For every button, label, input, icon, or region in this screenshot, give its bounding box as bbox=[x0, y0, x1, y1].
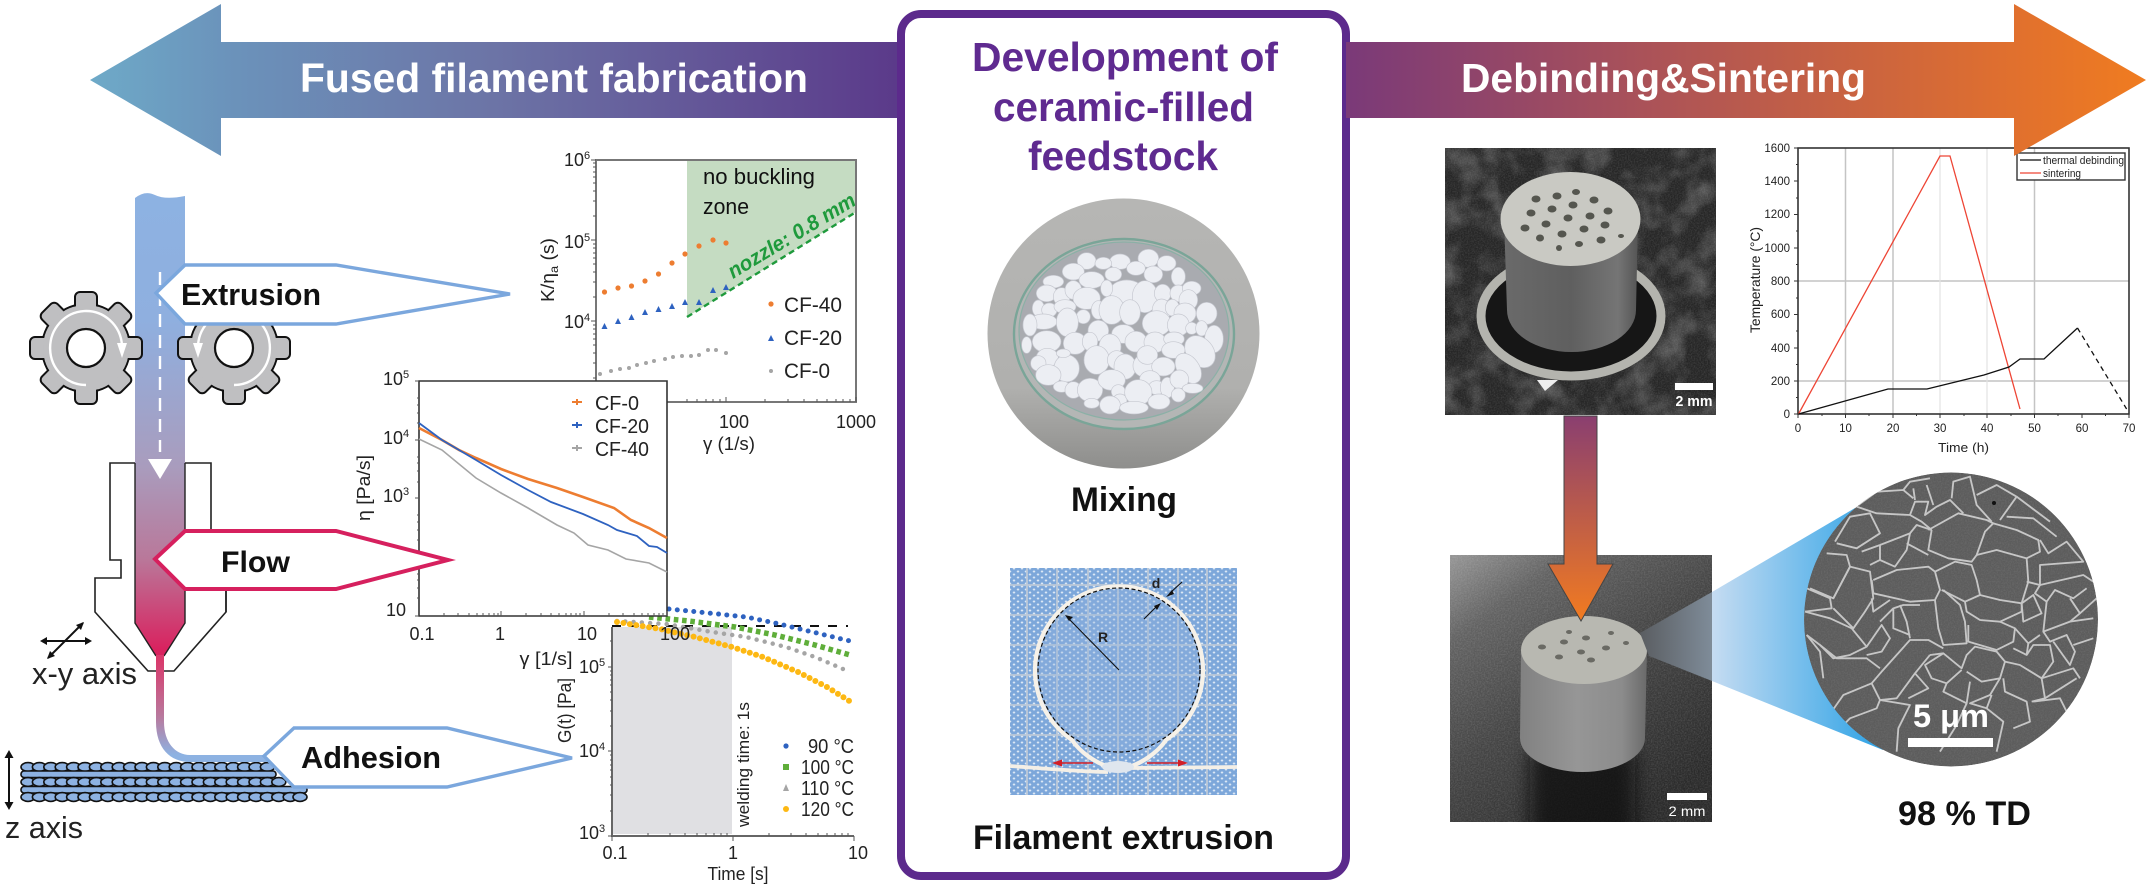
row 3 bbox=[21, 778, 286, 786]
scale bar bbox=[1908, 738, 1993, 747]
deposited layers bbox=[21, 763, 307, 801]
axis labels: 10 bbox=[579, 657, 599, 677]
axis labels: 0 bbox=[1784, 409, 1790, 421]
axis labels: (s) bbox=[538, 238, 558, 266]
photo: printed green part bbox=[1445, 148, 1716, 415]
series CF-40 bbox=[602, 237, 774, 307]
filament channel bbox=[135, 193, 185, 656]
curve CF-40 bbox=[419, 439, 667, 572]
axis labels: 5 bbox=[584, 232, 590, 244]
heading: development of ceramic-filled feedstock: feedstock bbox=[1028, 133, 1218, 179]
axis labels: 10 bbox=[579, 741, 599, 761]
row 5 bbox=[21, 793, 307, 801]
curve: sintering bbox=[1798, 156, 2020, 414]
axis labels: 10 bbox=[564, 150, 584, 170]
photo: SEM microstructure bbox=[1804, 472, 2098, 767]
scale bar bbox=[1675, 383, 1713, 410]
legend: CF-0 bbox=[595, 392, 639, 415]
axis labels: 4 bbox=[403, 428, 409, 440]
heading: development of ceramic-filled feedstock bbox=[972, 34, 1278, 179]
photo: filament loop on mesh: R bbox=[1098, 629, 1108, 645]
row 1 bbox=[21, 763, 274, 771]
icon: right gear bbox=[178, 292, 290, 404]
axis labels: 10 bbox=[1839, 423, 1852, 435]
axis labels: Time (h) bbox=[1938, 440, 1989, 455]
legend bbox=[572, 392, 649, 461]
axis labels bbox=[1747, 143, 2135, 455]
axis labels: 3 bbox=[599, 823, 605, 835]
nozzle outline bbox=[95, 463, 226, 671]
scale bar: 2 mm bbox=[1676, 393, 1712, 410]
axis labels: η [Pa/s] bbox=[354, 455, 374, 521]
label: x-y axis: x-y axis bbox=[32, 656, 137, 691]
heading: development of ceramic-filled feedstock: ceramic-filled bbox=[993, 84, 1254, 130]
axis labels: 1 bbox=[728, 843, 738, 863]
legend: CF-40 bbox=[784, 294, 842, 317]
row 4 bbox=[21, 786, 307, 793]
axis labels: 1600 bbox=[1764, 143, 1790, 155]
axis labels: 1000 bbox=[1764, 243, 1790, 255]
axis labels: 400 bbox=[1771, 343, 1790, 355]
label: 98 % TD: 98 % TD bbox=[1898, 795, 2031, 833]
axis labels: 600 bbox=[1771, 309, 1790, 321]
legend: CF-20 bbox=[784, 327, 842, 350]
arrow: filament direction bbox=[148, 272, 172, 479]
axis labels: 70 bbox=[2123, 423, 2135, 435]
callout: extrusion bbox=[156, 265, 510, 324]
axis labels: 10 bbox=[383, 428, 403, 448]
legend: 120 °C bbox=[801, 799, 854, 821]
legend: sintering bbox=[2043, 168, 2081, 180]
curve CF-0 bbox=[419, 428, 667, 538]
chart: viscosity vs shear rate bbox=[354, 369, 690, 669]
axis labels: 40 bbox=[1981, 423, 1993, 435]
axis labels: 10 bbox=[383, 486, 403, 506]
icon: x-y axis arrows bbox=[40, 622, 92, 659]
axis labels: 10 bbox=[383, 369, 403, 389]
axis labels: 5 bbox=[403, 369, 409, 381]
axis labels bbox=[538, 150, 876, 454]
axis labels: 0.1 bbox=[409, 624, 435, 644]
chart: relaxation modulus G(t) bbox=[555, 609, 868, 884]
callout: adhesion: Adhesion bbox=[301, 740, 441, 775]
scale bar: 2 mm bbox=[1668, 803, 1706, 819]
callout: flow: Flow bbox=[221, 546, 291, 579]
axis labels: 1200 bbox=[1764, 209, 1790, 221]
axis labels: a bbox=[547, 266, 561, 273]
green zone labels: zone bbox=[703, 194, 749, 219]
photo: sintered part bbox=[1450, 555, 1712, 840]
chart: temperature profile bbox=[1747, 143, 2135, 455]
axis labels: 20 bbox=[1887, 423, 1899, 435]
axis labels: 5 bbox=[599, 657, 605, 669]
legend: thermal debinding bbox=[2043, 155, 2124, 167]
axis labels: Temperature (°C) bbox=[1747, 227, 1763, 333]
green zone labels: nozzle: 0.8 mm bbox=[724, 189, 860, 283]
axis labels: 100 bbox=[719, 412, 749, 432]
axis labels bbox=[354, 369, 690, 669]
arrow: debinding and sintering bbox=[1346, 4, 2146, 156]
legend bbox=[784, 294, 842, 383]
legend: CF-40 bbox=[595, 438, 649, 461]
axis labels: 10 bbox=[579, 823, 599, 843]
green zone labels: no buckling bbox=[703, 164, 815, 189]
heading: development of ceramic-filled feedstock: Development of bbox=[972, 34, 1278, 80]
photo: filament loop on mesh: d bbox=[1152, 575, 1160, 591]
legend: 100 °C bbox=[801, 757, 854, 779]
axis labels: 0.1 bbox=[602, 843, 628, 863]
axis labels: 50 bbox=[2028, 423, 2041, 435]
legend: 110 °C bbox=[801, 778, 854, 800]
axis labels: 4 bbox=[599, 741, 605, 753]
callout: adhesion bbox=[264, 728, 572, 787]
axis labels: 10 bbox=[564, 232, 584, 252]
axis labels: 60 bbox=[2076, 423, 2088, 435]
axis labels: γ [1/s] bbox=[520, 649, 572, 669]
series 110 C bbox=[617, 621, 850, 672]
legend: CF-20 bbox=[595, 415, 649, 438]
axis labels: γ (1/s) bbox=[703, 434, 755, 454]
axis labels: 800 bbox=[1771, 276, 1790, 288]
curve CF-20 bbox=[419, 423, 667, 553]
legend bbox=[783, 736, 854, 821]
heading: fused filament fabrication: Fused filament fabrication bbox=[300, 55, 808, 101]
axis labels: 1400 bbox=[1764, 176, 1790, 188]
legend: 90 °C bbox=[808, 736, 854, 758]
icon: left gear bbox=[30, 292, 142, 404]
axis labels: 1 bbox=[495, 624, 505, 644]
extruded filament bbox=[156, 655, 285, 762]
axis labels: K/η bbox=[538, 275, 558, 302]
panel: development of ceramic-filled feedstock bbox=[901, 14, 1346, 876]
axis labels: 4 bbox=[584, 312, 590, 324]
series CF-20 bbox=[602, 284, 774, 341]
axis labels: 10 bbox=[564, 312, 584, 332]
chart: buckling K/eta vs shear rate bbox=[538, 150, 876, 454]
scale bar bbox=[1667, 793, 1707, 819]
welding time label: welding time: 1s bbox=[734, 702, 753, 828]
legend bbox=[2017, 153, 2125, 180]
axis labels: 1000 bbox=[836, 412, 876, 432]
photo: filament loop on mesh bbox=[1010, 568, 1237, 795]
axis labels bbox=[555, 657, 868, 884]
row 2 bbox=[21, 771, 276, 778]
axis labels: 10 bbox=[577, 624, 597, 644]
series 100 C bbox=[649, 617, 850, 655]
axis labels: 30 bbox=[1934, 423, 1946, 435]
series 90 C bbox=[669, 609, 850, 641]
callout: extrusion: Extrusion bbox=[181, 278, 321, 312]
callout: flow bbox=[155, 531, 448, 589]
arrow: debinding to sintering bbox=[1548, 416, 1613, 621]
magnification cone bbox=[1640, 508, 1883, 750]
photo: pellets in dish bbox=[988, 198, 1260, 468]
heading: debinding and sintering: Debinding&Sintering bbox=[1461, 55, 1866, 101]
axis labels: 0 bbox=[1795, 423, 1801, 435]
axis labels: 10 bbox=[848, 843, 868, 863]
curve: thermal debinding bbox=[1798, 328, 2127, 414]
axis labels: Time [s] bbox=[708, 864, 768, 884]
axis labels: 3 bbox=[403, 486, 409, 498]
axis labels: 6 bbox=[584, 150, 590, 162]
axis labels: 200 bbox=[1771, 376, 1790, 388]
label: z axis: z axis bbox=[5, 811, 83, 845]
axis labels: 100 bbox=[660, 624, 690, 644]
series CF-0 bbox=[598, 348, 773, 376]
legend: CF-0 bbox=[784, 360, 830, 383]
series 120 C bbox=[617, 622, 851, 702]
arrow: fused filament fabrication bbox=[90, 4, 900, 156]
label: filament extrusion: Filament extrusion bbox=[973, 819, 1274, 857]
axis labels: 10 bbox=[386, 600, 406, 620]
green zone labels bbox=[703, 164, 860, 283]
label: mixing: Mixing bbox=[1071, 481, 1177, 519]
scale label: 5 μm bbox=[1913, 698, 1989, 734]
icon: z axis arrow bbox=[4, 750, 14, 810]
axis labels: G(t) [Pa] bbox=[555, 678, 575, 743]
